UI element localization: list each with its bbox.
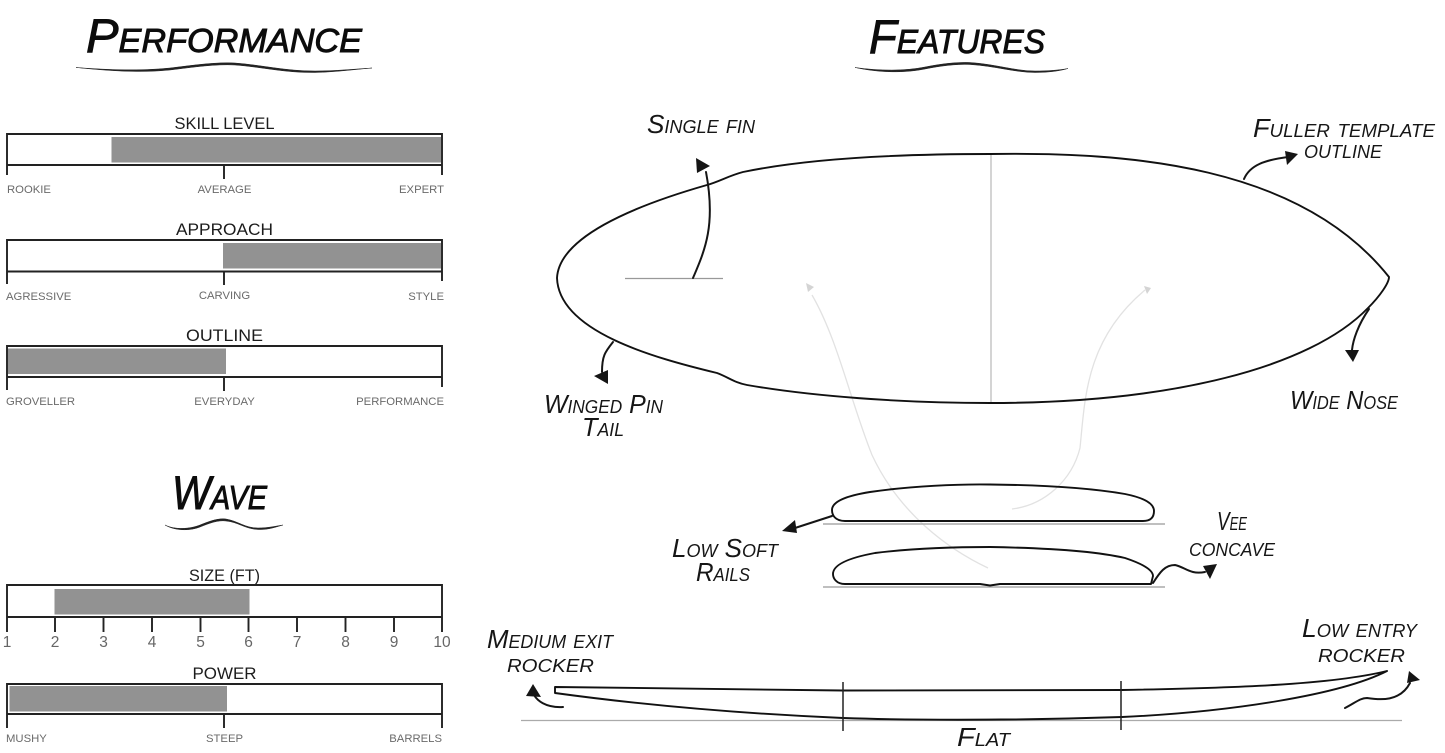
callout: low entry rocker: rocker: [1318, 638, 1405, 668]
callout: single fin: [647, 109, 756, 278]
slider: outline: GROVELLER: [6, 396, 75, 408]
slider: skill level: EXPERT: [399, 184, 444, 196]
slider: outline: EVERYDAY: [194, 396, 255, 408]
slider: outline: [6, 326, 444, 408]
callout: single fin: Single fin: [647, 109, 756, 139]
slider: size in feet: 7: [293, 634, 301, 651]
slider: skill level: [7, 114, 444, 196]
callout: vee concave: [1153, 506, 1276, 583]
slider: size in feet: [3, 566, 451, 651]
slider: outline: OUTLINE: [186, 326, 263, 345]
slider: skill level: AVERAGE: [198, 184, 252, 196]
callout: low entry rocker: Low entry: [1302, 613, 1419, 643]
callout: winged pin tail: Winged Pin: [544, 389, 664, 419]
callout: flat: Flat: [957, 722, 1012, 752]
callout: fuller template outline: outline: [1304, 134, 1383, 164]
callout: low soft rails: Rails: [696, 557, 750, 587]
slider: power: POWER: [192, 664, 256, 683]
slider: power: [6, 664, 442, 745]
cross-section: vee concave: [823, 547, 1165, 587]
slider: size in feet: 10: [433, 634, 451, 651]
callout: low entry rocker: [1302, 613, 1420, 708]
grey arrow: tail outline to side profile: [806, 283, 988, 568]
callout: wide nose: [1290, 309, 1399, 415]
board outline: top view: [557, 154, 1389, 403]
slider: skill level: ROOKIE: [7, 184, 51, 196]
heading: Wave: Wave: [172, 466, 268, 519]
slider: approach: CARVING: [199, 290, 250, 302]
heading: Performance: Performance: [86, 9, 363, 62]
callout: low soft rails: [672, 516, 832, 587]
slider: size in feet: 5: [196, 634, 205, 651]
callout: winged pin tail: [544, 342, 664, 442]
slider: power: STEEP: [206, 733, 243, 745]
slider: approach: [6, 220, 444, 303]
callout: fuller template outline: [1244, 113, 1436, 179]
slider: size in feet: 1: [3, 634, 11, 651]
callout: medium exit rocker: [487, 624, 615, 707]
slider: size in feet: SIZE (FT): [189, 566, 260, 585]
callout: fuller template outline: Fuller template: [1253, 113, 1436, 143]
slider: power: BARRELS: [389, 733, 442, 745]
grey arrow: nose outline to side profile: [1012, 286, 1151, 509]
callout: vee concave: Vee: [1217, 506, 1248, 536]
slider: power: MUSHY: [6, 733, 47, 745]
callout: medium exit rocker: rocker: [507, 648, 594, 678]
slider: skill level: SKILL LEVEL: [174, 114, 274, 133]
callout: vee concave: concave: [1189, 532, 1276, 562]
slider: size in feet: 2: [51, 634, 59, 651]
slider: size in feet: 8: [341, 634, 350, 651]
callout: medium exit rocker: Medium exit: [487, 624, 615, 654]
slider: approach: APPROACH: [176, 220, 273, 239]
slider: approach: AGRESSIVE: [6, 291, 72, 303]
slider: size in feet: 3: [99, 634, 108, 651]
rocker profile: side view: [521, 671, 1402, 731]
slider: size in feet: 9: [390, 634, 398, 651]
cross-section: low soft rails: [823, 484, 1165, 524]
slider: outline: PERFORMANCE: [356, 396, 444, 408]
slider: approach: STYLE: [408, 291, 444, 303]
slider: size in feet: 6: [244, 634, 253, 651]
heading: Features: Features: [869, 10, 1045, 63]
callout: winged pin tail: Tail: [582, 412, 624, 442]
slider: size in feet: 4: [148, 634, 157, 651]
callout: low soft rails: Low Soft: [672, 533, 780, 563]
callout: wide nose: Wide Nose: [1290, 385, 1399, 415]
